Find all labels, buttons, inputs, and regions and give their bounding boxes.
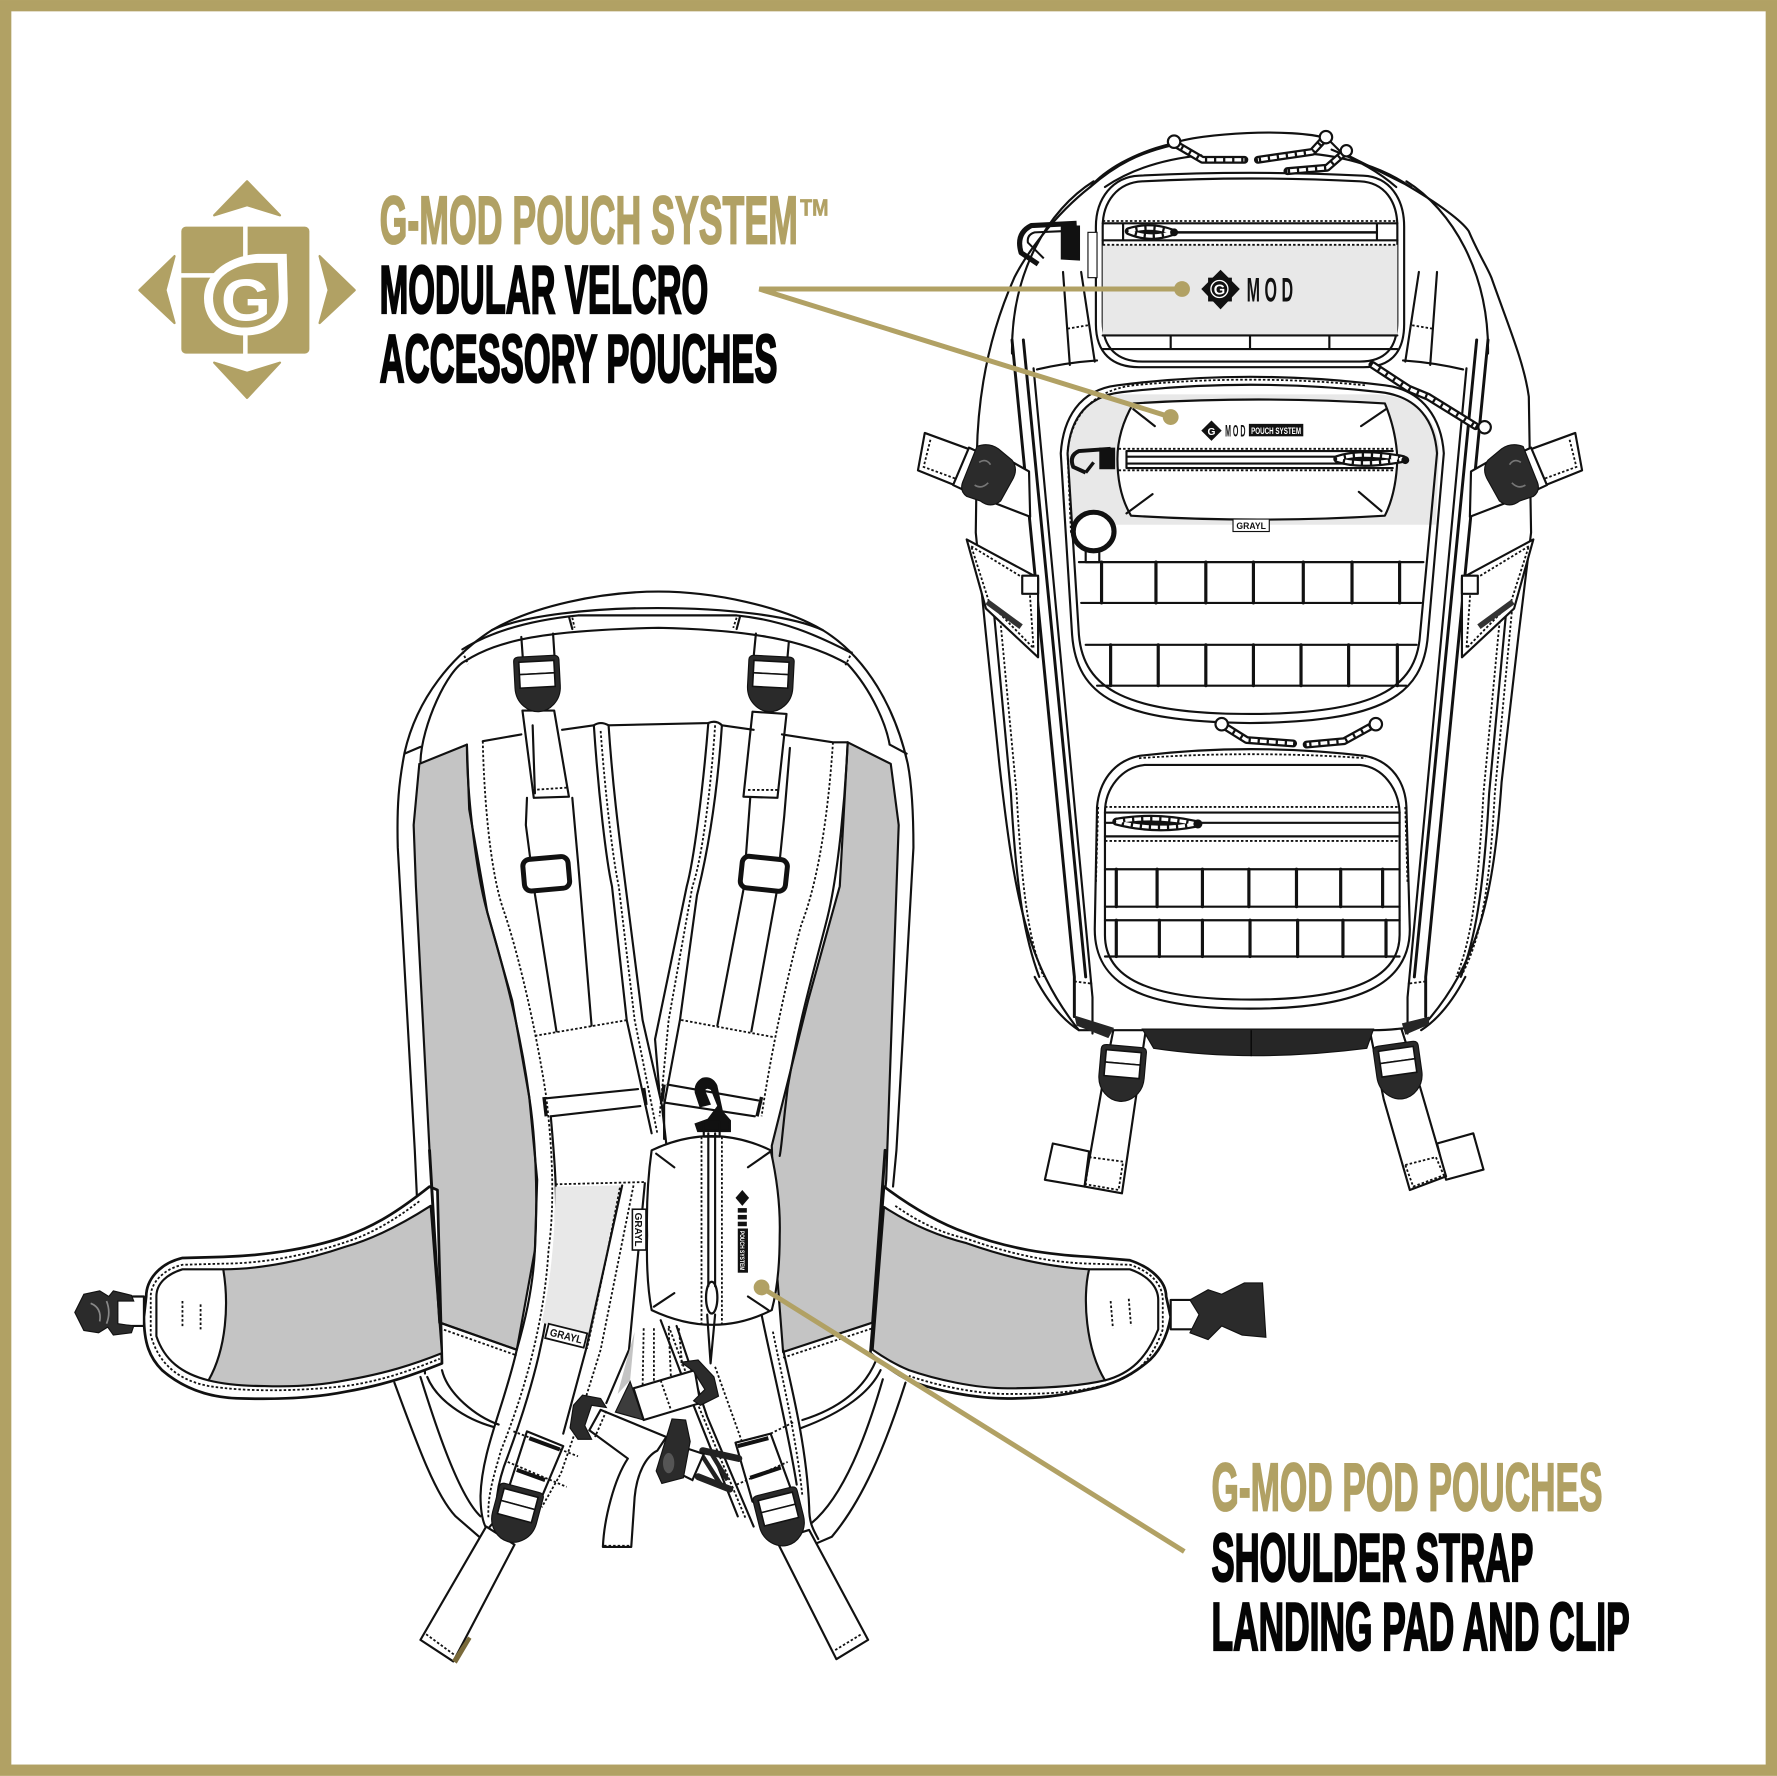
velcro landing patch: [440, 1182, 873, 1507]
lower right strap and buckle: [736, 1422, 868, 1659]
text: modular velcro accessory pouches: ACCESSORY POUCHES: [380, 322, 777, 397]
mesh left: [414, 745, 537, 1350]
shoulder strap left: [467, 722, 848, 1536]
chest clip: [696, 1078, 730, 1131]
small logo: G: [1208, 427, 1216, 438]
vertical logo: POUCH SYSTEM: [738, 1231, 745, 1271]
G-MOD logo patch: [1201, 270, 1293, 309]
MOLLE webbing rows: [1079, 562, 1423, 686]
leader lines: [754, 281, 1190, 1551]
dot: top pouch: [1174, 281, 1190, 297]
GRAYL tag: GRAYL: [1236, 521, 1266, 532]
vertical logo: [736, 1190, 749, 1273]
GRAYL tag patch: GRAYL: [549, 1327, 584, 1347]
sternum clip: [656, 1419, 739, 1489]
G-MOD logo patch: G: [1214, 283, 1225, 299]
middle panel: [1061, 377, 1444, 723]
top shoulder lines: [1090, 145, 1411, 187]
heading: G-MOD pouch system: G-MOD POUCH SYSTEM: [380, 184, 798, 259]
leader: top pouch: [759, 289, 1182, 417]
lower left strap and buckle: [420, 1431, 578, 1664]
dot: middle pouch: [1163, 409, 1179, 425]
lower strap area: [618, 1315, 818, 1539]
zipper cord side: [1372, 365, 1491, 433]
lower side tab outline: [430, 1150, 885, 1323]
text: modular velcro accessory pouches: [380, 253, 777, 397]
lower pouch: [1095, 749, 1410, 1009]
zipper cord top: [1168, 131, 1352, 171]
carabiner clip: [1020, 223, 1080, 264]
lower webbing loops: [394, 1377, 905, 1544]
GRAYL tag vertical: GRAYL: [632, 1213, 643, 1247]
hip belt left: [75, 1187, 442, 1399]
small logo: POUCH SYSTEM: [1251, 426, 1301, 436]
bottom straps front: [1045, 1027, 1483, 1193]
leader: pod pouch: [762, 1287, 1184, 1551]
shoulder strap right: [655, 723, 848, 1156]
small carabiner: [1072, 448, 1115, 473]
icon: G-MOD logo: [139, 181, 355, 398]
O-ring: [1073, 512, 1114, 562]
top pouch: [1020, 173, 1404, 367]
frame lines: [405, 608, 907, 1428]
sternum strap and buckle: [570, 1360, 739, 1547]
icon: G-MOD logo: G: [221, 269, 271, 334]
heading: G-MOD pouch system: [380, 184, 828, 259]
body outline: [976, 133, 1531, 1030]
text: shoulder strap landing pad and clip: [1211, 1521, 1630, 1665]
heading: G-MOD pouch system: TM: [800, 194, 828, 220]
pod pouch on panel: [1117, 399, 1409, 520]
back body: [398, 592, 913, 1426]
GRAYL tag vertical: [632, 1209, 646, 1250]
body side details: [918, 181, 1097, 1034]
top webbing and adjusters: [513, 634, 794, 1031]
illustration: backpack front view: [918, 131, 1582, 1193]
hip buckle right: [1171, 1283, 1266, 1340]
hip belt right: [870, 1187, 1266, 1398]
top pouch: M O D: [1247, 271, 1293, 309]
zipper cords lower: [1215, 718, 1382, 745]
small logo: M O D: [1225, 421, 1245, 440]
hip buckle left: [75, 1291, 144, 1335]
body side details mirrored: [1403, 181, 1582, 1034]
tag: [1088, 232, 1097, 278]
small logo: [1201, 420, 1303, 441]
illustration: backpack back view: [75, 592, 1266, 1664]
pod pouch on strap: [647, 1122, 780, 1363]
dot: pod pouch: [754, 1279, 770, 1295]
bottom velcro band: [1074, 1015, 1429, 1056]
text: modular velcro accessory pouches: MODULAR VELCRO: [380, 253, 708, 328]
mesh right: [772, 742, 899, 1352]
